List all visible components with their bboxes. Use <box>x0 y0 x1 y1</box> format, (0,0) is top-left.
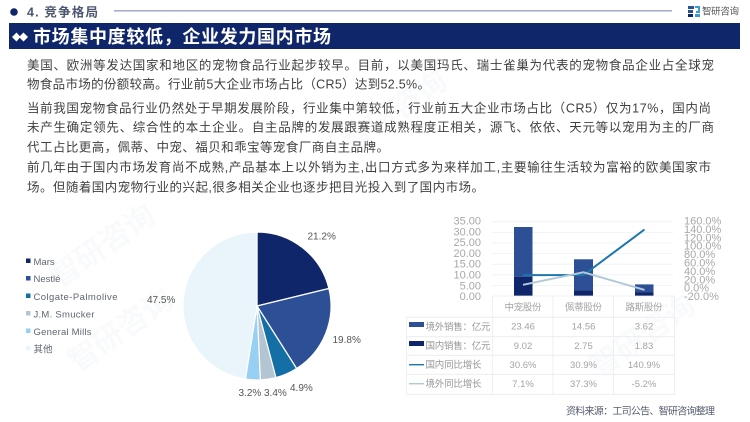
pie legend: Colgate-Palmolive <box>34 292 118 303</box>
text: 智研咨询 <box>44 199 161 294</box>
pie labels: 4.9% <box>290 383 313 394</box>
pie legend: General Mills <box>34 327 92 338</box>
logo: 智研咨询: 智研咨询 <box>702 6 739 18</box>
data table: 7.1% <box>512 379 534 390</box>
data table: 140.9% <box>628 360 661 371</box>
data table: 境外同比增长 <box>426 378 482 390</box>
left axis labels: 35.00 <box>453 216 481 228</box>
data table: 30.6% <box>510 360 537 371</box>
pie chart <box>183 232 331 380</box>
data table: 9.02 <box>514 341 532 352</box>
left axis labels: 5.00 <box>460 280 481 292</box>
right axis labels: 20.0% <box>684 274 715 286</box>
right axis labels: 60.0% <box>684 258 715 270</box>
data table: 37.3% <box>570 379 598 390</box>
left axis labels: 20.00 <box>453 248 481 260</box>
pie legend: Mars <box>34 257 55 268</box>
section heading: 4. 竞争格局 <box>27 4 98 20</box>
title banner: 市场集中度较低，企业发力国内市场 <box>33 26 331 47</box>
source note: 资料来源：工司公告、智研咨询整理 <box>566 404 715 418</box>
pie labels <box>147 232 361 399</box>
data table: 路斯股份 <box>626 302 663 314</box>
line: 境外同比增长 <box>523 272 644 290</box>
body text: 物食品市场的份额较高。行业前5大企业市场占比（CR5）达到52.5%。 <box>27 76 430 92</box>
text: 智研咨询 <box>62 283 180 379</box>
body text <box>27 58 714 194</box>
data table: 国内销售：亿元 <box>426 340 491 352</box>
combo chart <box>453 216 722 303</box>
right axis labels: 160.0% <box>684 216 722 228</box>
right axis labels: 140.0% <box>684 224 722 236</box>
pie legend: Nestlé <box>34 274 60 285</box>
data table: 境外销售：亿元 <box>426 321 491 333</box>
data table: 3.62 <box>635 322 653 332</box>
left axis labels: 30.00 <box>453 226 481 238</box>
left axis labels: 15.00 <box>453 259 481 271</box>
pie labels: 19.8% <box>332 335 361 346</box>
pie labels: 21.2% <box>308 232 336 242</box>
body text: 代工占比更高，佩蒂、中宠、福贝和乖宝等宠食厂商自主品牌。 <box>27 140 389 154</box>
pie labels: 3.4% <box>264 388 287 399</box>
data table: 23.46 <box>511 322 535 332</box>
section heading <box>10 4 672 20</box>
pie legend <box>26 257 118 356</box>
data table: 佩蒂股份 <box>565 302 602 314</box>
data table: 1.83 <box>635 341 653 352</box>
right axis labels: 0.0% <box>684 283 709 295</box>
pie labels: 3.2% <box>238 388 261 399</box>
pie labels: 47.5% <box>147 295 175 306</box>
body text: 前几年由于国内市场发育尚不成熟,产品基本上以外销为主,出口方式多为来样加工,主要输往生活较为富裕的欧美国家市 <box>27 160 711 174</box>
right axis labels: 80.0% <box>684 249 715 261</box>
data table: 30.9% <box>570 360 598 371</box>
data table: 14.56 <box>572 322 595 332</box>
right axis labels: -20.0% <box>684 291 719 303</box>
body text: 美国、欧洲等发达国家和地区的宠物食品行业起步较早。目前，以美国玛氏、瑞士雀巢为代表的宠物食品企业占全球宠 <box>27 58 714 72</box>
body text: 场。但随着国内宠物行业的兴起,很多相关企业也逐步把目光投入到了国内市场。 <box>27 180 484 194</box>
title banner <box>9 23 740 49</box>
data table <box>406 296 674 394</box>
left axis labels: 25.00 <box>453 237 481 249</box>
data table: 中宠股份 <box>504 302 542 314</box>
logo: 智研咨询 <box>688 6 739 18</box>
text: 智研咨询 <box>584 289 701 384</box>
pie legend: J.M. Smucker <box>34 310 94 320</box>
right axis labels: 100.0% <box>684 241 722 253</box>
pie legend: 其他 <box>34 344 53 356</box>
data table: 国内同比增长 <box>426 359 482 371</box>
right axis labels: 120.0% <box>684 232 722 244</box>
line: 国内同比增长 <box>523 230 644 275</box>
body text: 当前我国宠物食品行业仍然处于早期发展阶段，行业集中第较低，行业前五大企业市场占比（CR5）仅为17%，国内尚 <box>27 100 711 116</box>
text: 智研咨询 <box>336 64 453 160</box>
left axis labels <box>453 216 481 303</box>
left axis labels: 10.00 <box>453 270 481 282</box>
data table: -5.2% <box>632 379 657 390</box>
data table: 2.75 <box>574 341 593 352</box>
left axis labels: 0.00 <box>460 291 481 303</box>
bars <box>514 227 654 296</box>
body text: 未产生确定领先、综合性的本土企业。自主品牌的发展跟赛道成熟程度正相关，源飞、依依、天元等以宠用为主的厂商 <box>27 120 714 134</box>
right axis labels: 40.0% <box>684 266 715 278</box>
right axis labels <box>684 216 722 303</box>
